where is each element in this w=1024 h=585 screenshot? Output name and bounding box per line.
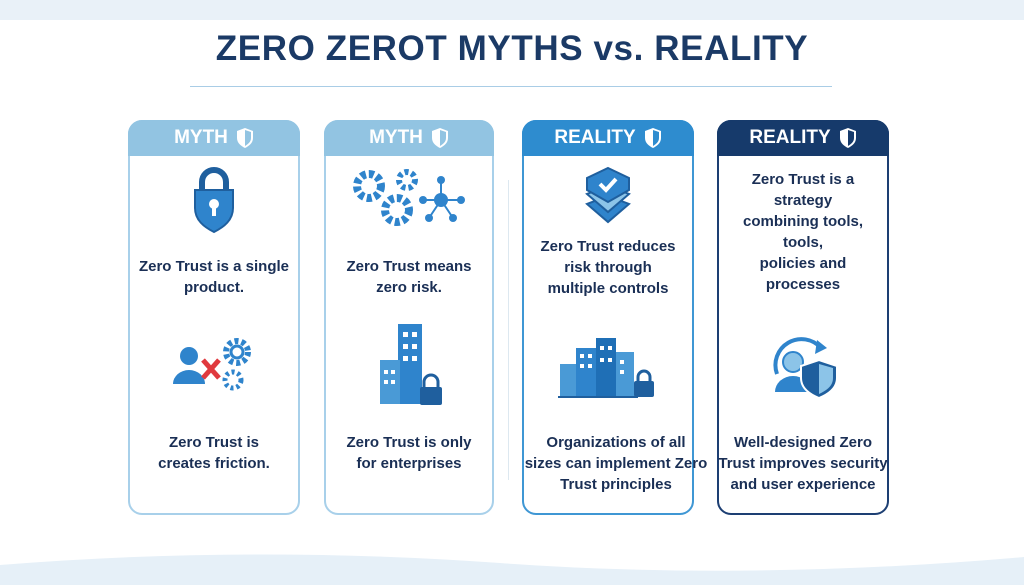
text: Zero Trust is [169, 434, 259, 451]
text [743, 171, 863, 293]
text [540, 238, 676, 297]
text [346, 258, 472, 296]
text: Zero Trust is a [752, 171, 854, 188]
text: sizes can implement Zero [525, 455, 707, 472]
header [717, 120, 889, 156]
text: product. [184, 279, 244, 296]
icon: city buildings with lock [558, 338, 654, 398]
header: MYTH [174, 127, 228, 148]
panel: myth 2 [324, 120, 494, 515]
text [525, 434, 707, 493]
text [158, 434, 270, 472]
icon: building with lock [380, 324, 442, 405]
text: Well-designed Zero [734, 434, 872, 451]
divider [508, 180, 509, 480]
icon: padlock [194, 167, 234, 234]
panel: myth 1 [128, 120, 300, 515]
text [346, 434, 472, 472]
text: zero risk. [376, 279, 442, 296]
text: risk through [564, 259, 652, 276]
text: Zero Trust is a single [139, 258, 289, 275]
text: processes [766, 276, 840, 293]
icon: gears and network [353, 169, 465, 226]
text: and user experience [730, 476, 876, 493]
text [139, 258, 289, 296]
text: strategy [774, 192, 832, 209]
header [324, 120, 494, 156]
text: Trust improves security [718, 455, 888, 472]
text: Trust principles [560, 476, 672, 493]
icon: stacked layers check [585, 166, 631, 224]
title: ZERO ZEROT MYTHS vs. REALITY [216, 29, 808, 68]
text: Zero Trust reduces [540, 238, 676, 255]
text: tools, [783, 234, 823, 251]
icon: user with X and gears [173, 338, 251, 390]
panel: reality 2 [717, 120, 889, 515]
header: REALITY [554, 127, 636, 148]
text [718, 434, 888, 493]
text: Organizations of all [546, 434, 686, 451]
text: multiple controls [548, 280, 668, 297]
header [522, 120, 694, 156]
header: MYTH [369, 127, 423, 148]
text: Zero Trust means [346, 258, 472, 275]
header: REALITY [749, 127, 831, 148]
text: combining tools, [743, 213, 863, 230]
bottom wave [0, 554, 1024, 585]
icon: user with shield and arrow [773, 337, 836, 397]
text: policies and [760, 255, 846, 272]
header [128, 120, 300, 156]
text: creates friction. [158, 455, 270, 472]
text: Zero Trust is only [346, 434, 472, 451]
text: for enterprises [356, 455, 462, 472]
panel: reality 1 [522, 120, 694, 515]
top band [0, 0, 1024, 20]
